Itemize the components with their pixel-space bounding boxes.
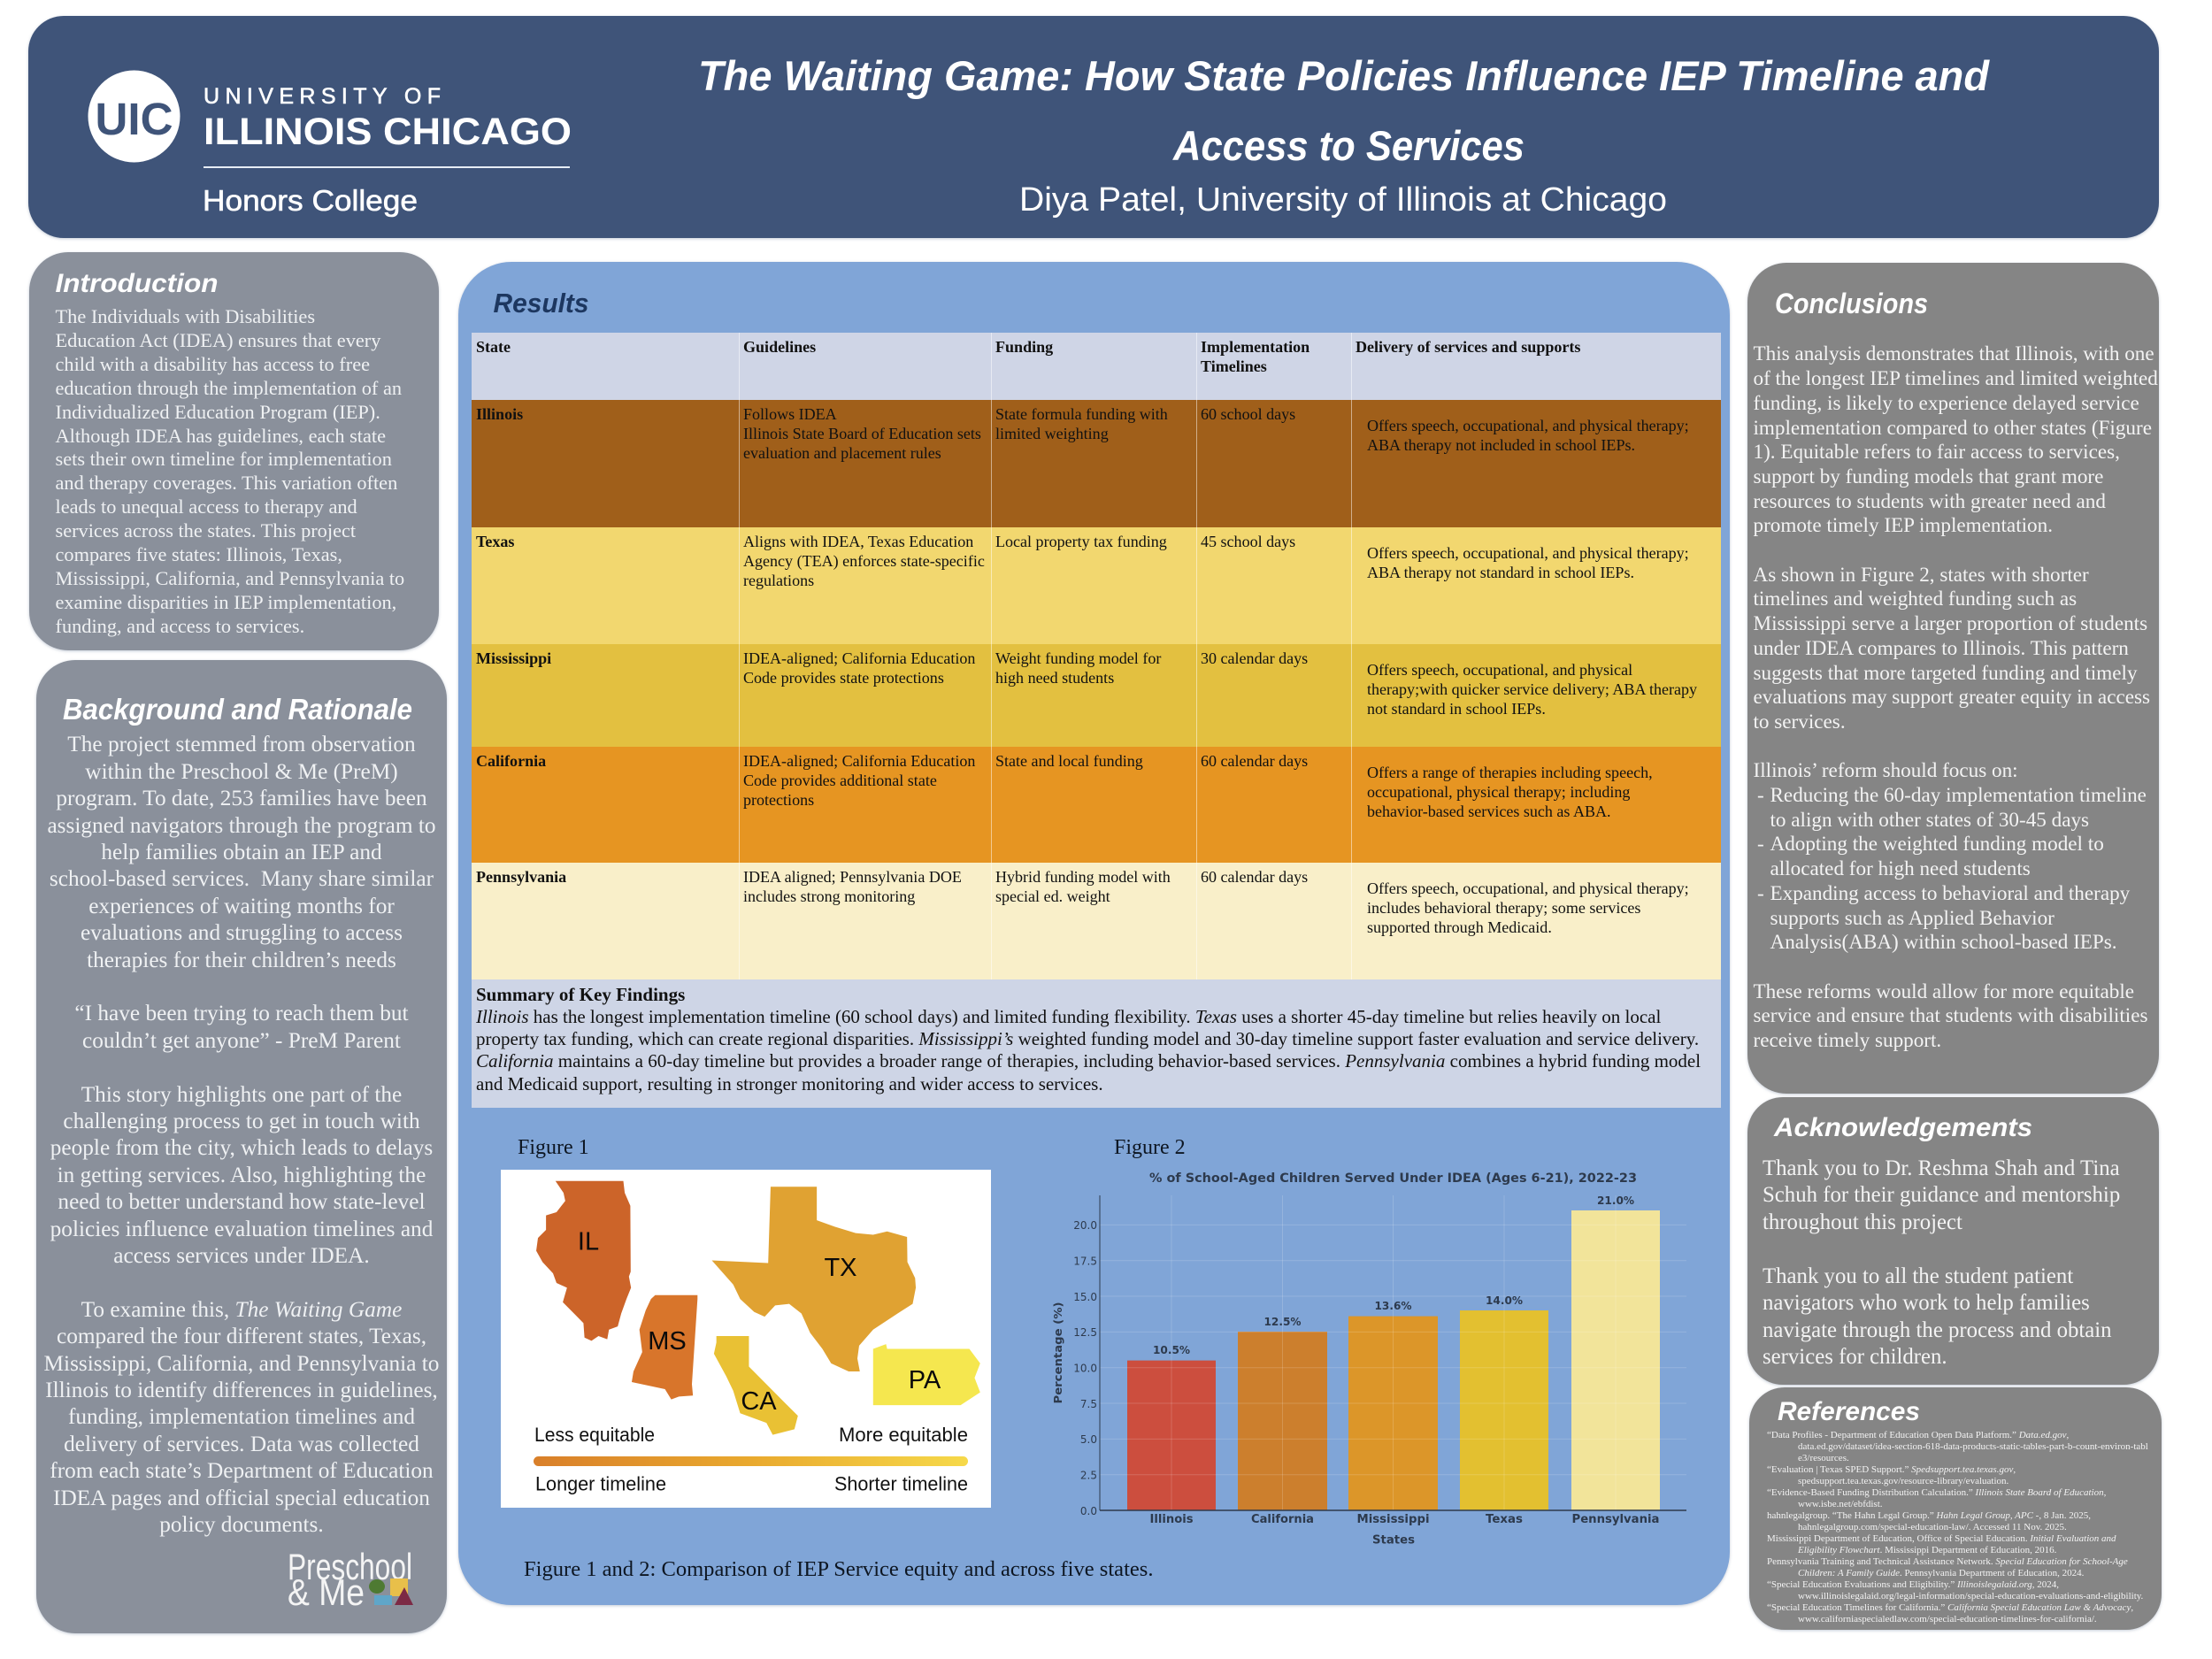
text: background body: access services under IDEA. — [113, 1243, 370, 1268]
row: Pennsylvania — [472, 863, 1721, 979]
logo: Preschool & Me — [288, 1548, 413, 1607]
y axis tick labels: 0.0 — [1080, 1505, 1097, 1517]
figure 1: state equity map — [501, 1170, 991, 1508]
value labels: 21.0% — [1597, 1194, 1634, 1207]
figure 1: state equity map: CA — [741, 1387, 777, 1416]
heading: Results: Results — [494, 288, 589, 319]
figure 1: state equity map: IL — [578, 1228, 599, 1256]
text: background body: compared the four different states, Texas, — [57, 1324, 426, 1348]
row: Texas: Agency (TEA) enforces state-specific — [743, 552, 985, 570]
text: acknowledgements body: throughout this project — [1763, 1210, 1962, 1233]
text: conclusions body: These reforms would allow for more equitable — [1754, 980, 2134, 1003]
text: background body — [44, 732, 439, 1537]
row: Illinois: evaluation and placement rules — [743, 444, 941, 462]
text: background body: help families obtain an IEP and — [101, 840, 382, 864]
panel: background and rationale — [36, 660, 447, 1633]
text: introduction body: Mississippi, California, and Pennsylvania to — [55, 567, 404, 589]
row: Mississippi: Mississippi — [476, 649, 551, 667]
text: acknowledgements body: Schuh for their guidance and mentorship — [1763, 1183, 2120, 1207]
value labels — [1153, 1194, 1634, 1356]
y axis tick labels: 7.5 — [1080, 1398, 1097, 1410]
text: introduction body: child with a disability has access to free — [55, 353, 370, 375]
text: conclusions body: timelines and weighted funding such as — [1754, 588, 2077, 611]
row: California: 60 calendar days — [1201, 752, 1308, 770]
text: conclusions body: of the longest IEP timelines and limited weighted — [1754, 367, 2158, 390]
figure 1: state equity map: MS — [648, 1327, 687, 1356]
value labels: 14.0% — [1486, 1294, 1523, 1307]
text: reference list: spedsupport.tea.texas.gov/resource-library/evaluation. — [1798, 1476, 2008, 1486]
row: California: Code provides additional state — [743, 772, 937, 789]
title: The Waiting Game: How State Policies Influence IEP Timeline and — [698, 52, 1990, 99]
row: Illinois: Follows IDEA — [743, 405, 837, 423]
title: Access to Services — [1172, 122, 1525, 169]
table header row: Timelines — [1201, 357, 1267, 375]
text: introduction body: education through the implementation of an — [55, 377, 402, 399]
text: background body: This story highlights one part of the — [81, 1082, 402, 1107]
text: reference list: “Data Profiles - Department of Education Open Data Platform.” Data.ed.gov, “Evaluation | Texas SPED Support.” Spedsupport.tea.texas.gov, “Evidence-Based Funding Distribution Calculation.” Illinois State Board of Education, hahnlegalgroup. “The Hahn Legal Group.” Hahn Legal Group, APC -, 8 Jan. 2025, Mississippi Department of Education, Office of Special Education. Initial Evaluation and Pennsylvania Training and Technical Assistance Network. Special Education for School-Age “Special Education Evaluations and Eligibility.” Illinoislegalaid.org, 2024, “Special Education Timelines for California.” California Special Education Law & Advocacy, — [1767, 1430, 2133, 1612]
text: background body: in getting services. Also, highlighting the — [58, 1163, 426, 1187]
figure 1: state equity map: TX — [824, 1254, 857, 1282]
state shape: Pennsylvania — [873, 1344, 980, 1405]
text: background body: therapies for their children’s needs — [87, 948, 396, 972]
logo: UIC Honors College: Honors College — [203, 184, 418, 217]
summary of key findings: property tax funding, which can create regional disparities. Mississippi’s weighted funding model and 30-day timeline support faster evaluation and service delivery. — [476, 1028, 1699, 1049]
row: Mississippi: IDEA-aligned; California Education — [743, 649, 975, 667]
row: Pennsylvania: Pennsylvania — [476, 868, 566, 886]
x axis labels: Pennsylvania — [1571, 1513, 1660, 1526]
text: conclusions body: suggests that more targeted funding and timely — [1754, 662, 2138, 685]
text: introduction body: services across the states. This project — [55, 519, 356, 541]
text: reference list: data.ed.gov/dataset/idea-section-618-data-products-static-tables-part-b-count-environ-tabl — [1798, 1440, 2148, 1451]
y axis tick labels: 20.0 — [1073, 1219, 1097, 1232]
legend: equity and timeline scale: More equitable — [839, 1424, 968, 1446]
table header row: State — [476, 338, 511, 356]
heading: Background and Rationale: Background and Rationale — [63, 693, 412, 726]
text: introduction body: sets their own timeline for implementation — [55, 448, 392, 470]
header banner — [28, 16, 2159, 238]
text: background body: challenging process to get in touch with — [63, 1109, 420, 1133]
text: reference list: e3/resources. — [1798, 1453, 1849, 1463]
text: conclusions body: supports such as Applied Behavior — [1770, 907, 2055, 930]
row: Illinois — [472, 400, 1721, 527]
text: conclusions body: - — [1757, 882, 1764, 905]
row: Texas: Aligns with IDEA, Texas Education — [743, 533, 973, 550]
text: reference list: Eligibility Flowchart. Mississippi Department of Education, 2016. — [1798, 1545, 2056, 1555]
row: Mississippi: Offers speech, occupational, and physical — [1367, 661, 1632, 679]
heading: Introduction: Introduction — [55, 269, 218, 298]
logo: UIC Honors College: UIC — [96, 94, 173, 144]
text: background body: within the Preschool & Me (PreM) — [85, 759, 398, 784]
text: introduction body: Individualized Education Program (IEP). — [55, 401, 380, 423]
x axis labels: Texas — [1486, 1513, 1523, 1526]
text: acknowledgements body — [1763, 1156, 2120, 1369]
legend: equity and timeline scale: Shorter timeline — [834, 1472, 968, 1495]
text: background body: people from the city, which leads to delays — [50, 1135, 433, 1160]
row: Illinois: limited weighting — [995, 425, 1109, 442]
row: California: State and local funding — [995, 752, 1143, 770]
text: background body: policies influence evaluation timelines and — [50, 1217, 433, 1241]
text: conclusions body: As shown in Figure 2, states with shorter — [1754, 564, 2089, 587]
table header row: Funding — [995, 338, 1053, 356]
heading: Conclusions: Conclusions — [1775, 288, 1928, 319]
figure 2: bar chart: % of School-Aged Children Served Under IDEA (Ages 6-21), 2022-23 — [1149, 1171, 1637, 1186]
heading: Acknowledgements: Acknowledgements — [1773, 1113, 2032, 1142]
row: Pennsylvania: 60 calendar days — [1201, 868, 1308, 886]
y axis tick labels: 15.0 — [1073, 1291, 1097, 1303]
x axis labels: States — [1372, 1534, 1415, 1547]
text: conclusions body: under IDEA compares to Illinois. This pattern — [1754, 637, 2129, 660]
row: Illinois: Illinois State Board of Education sets — [743, 425, 981, 442]
legend: equity and timeline scale — [534, 1424, 968, 1495]
row: Pennsylvania: includes strong monitoring — [743, 887, 915, 905]
y axis tick labels: 12.5 — [1073, 1326, 1097, 1339]
text: background body: policy documents. — [159, 1512, 324, 1537]
text: reference list: www.californiaspecialedlaw.com/special-education-timelines-for-california/. — [1798, 1614, 2097, 1624]
text: conclusions body: to align with other states of 30-45 days — [1770, 809, 2089, 832]
summary of key findings — [472, 979, 1721, 1108]
summary of key findings: Summary of Key Findings — [476, 984, 685, 1005]
text: conclusions body: receive timely support. — [1754, 1029, 1941, 1052]
row: Texas: Local property tax funding — [995, 533, 1167, 550]
table header row — [472, 333, 1721, 400]
text: conclusions body: allocated for high need students — [1770, 857, 2031, 880]
row: Pennsylvania: supported through Medicaid. — [1367, 918, 1552, 936]
x axis labels — [1051, 1302, 1660, 1547]
text: background body: Illinois to identify differences in guidelines, — [45, 1378, 438, 1402]
row: Texas — [472, 527, 1721, 644]
text: conclusions body: Mississippi serve a larger proportion of students — [1754, 612, 2147, 635]
label: Figure 2: Figure 2 — [1114, 1136, 1186, 1159]
text: acknowledgements body: services for children. — [1763, 1345, 1947, 1369]
row: Illinois: Offers speech, occupational, and physical therapy; — [1367, 417, 1689, 434]
text: background body: evaluations and struggling to access — [81, 920, 403, 945]
row: Illinois: ABA therapy not included in school IEPs. — [1367, 436, 1635, 454]
logo: UIC Honors College: ILLINOIS CHICAGO — [204, 111, 572, 153]
row: California: California — [476, 752, 546, 770]
x axis labels: Illinois — [1150, 1513, 1194, 1526]
row: Pennsylvania: includes behavioral therapy; some services — [1367, 899, 1640, 917]
text: conclusions body: Adopting the weighted funding model to — [1770, 833, 2104, 856]
table header row: Guidelines — [743, 338, 816, 356]
text: background body: funding, implementation timelines and — [68, 1404, 415, 1429]
text: background body: school-based services. Many share similar — [50, 866, 434, 891]
table: state comparison — [472, 333, 1721, 1108]
legend: equity and timeline scale: Less equitable — [534, 1424, 655, 1446]
text: introduction body: leads to unequal access to therapy and — [55, 495, 357, 518]
text: background body: program. To date, 253 families have been — [56, 786, 427, 810]
text: conclusions body — [1754, 342, 2158, 1052]
text: introduction body: The Individuals with Disabilities — [55, 305, 315, 327]
summary of key findings: and Medicaid support, resulting in stronger monitoring and wider access to services. — [476, 1073, 1103, 1094]
text: background body: from each state’s Department of Education — [50, 1458, 434, 1483]
row: California: protections — [743, 791, 814, 809]
text: reference list: Children: A Family Guide. Pennsylvania Department of Education, 2024. — [1798, 1568, 2084, 1578]
row: Texas: regulations — [743, 572, 814, 589]
state shape: California — [714, 1336, 798, 1435]
text: introduction body: and therapy coverages. This variation often — [55, 472, 397, 494]
panel: acknowledgements — [1747, 1097, 2159, 1385]
value labels: 10.5% — [1153, 1343, 1190, 1356]
text: conclusions body: implementation compared to other states (Figure — [1754, 416, 2152, 439]
text: acknowledgements body: navigators who work to help families — [1763, 1291, 2090, 1315]
panel: introduction — [29, 252, 439, 650]
panel: results — [458, 262, 1730, 1605]
value labels: 13.6% — [1375, 1299, 1412, 1312]
text: conclusions body: funding, is likely to experience delayed service — [1754, 392, 2139, 415]
logo: UIC Honors College: UNIVERSITY OF — [204, 84, 441, 109]
y axis tick labels: 5.0 — [1080, 1433, 1097, 1446]
state shape: Mississippi — [632, 1295, 697, 1400]
row: Mississippi: therapy;with quicker service delivery; ABA therapy — [1367, 680, 1697, 698]
row: Pennsylvania: special ed. weight — [995, 887, 1110, 905]
y axis tick labels: 2.5 — [1080, 1469, 1097, 1481]
text: background body: The project stemmed from observation — [67, 732, 416, 757]
text: conclusions body: promote timely IEP implementation. — [1754, 514, 2053, 537]
text: background body: experiences of waiting months for — [88, 894, 395, 918]
row: Mississippi: Code provides state protections — [743, 669, 944, 687]
text: conclusions body: service and ensure that students with disabilities — [1754, 1004, 2148, 1027]
text: introduction body — [55, 305, 404, 637]
row: Mississippi: 30 calendar days — [1201, 649, 1308, 667]
text: introduction body: funding, and access to services. — [55, 615, 304, 637]
row: California: behavior-based services such as ABA. — [1367, 803, 1611, 820]
row: Pennsylvania: IDEA aligned; Pennsylvania DOE — [743, 868, 962, 886]
text: conclusions body: - — [1757, 784, 1764, 807]
text: conclusions body: Illinois’ reform should focus on: — [1754, 759, 2018, 782]
table header row: Delivery of services and supports — [1356, 338, 1580, 356]
text: background body: Mississippi, California, and Pennsylvania to — [44, 1351, 439, 1376]
text: introduction body: Education Act (IDEA) ensures that every — [55, 329, 380, 351]
legend: equity and timeline scale: Longer timeline — [535, 1472, 666, 1495]
row: California — [472, 747, 1721, 863]
figure 2: bar chart — [1053, 1171, 1686, 1547]
text: conclusions body: resources to students with greater need and — [1754, 490, 2106, 513]
text: background body: To examine this, The Waiting Game — [81, 1297, 402, 1322]
x axis labels: California — [1251, 1513, 1314, 1526]
text: background body: assigned navigators through the program to — [47, 813, 436, 838]
panel: references — [1749, 1387, 2162, 1630]
row: Texas: Texas — [476, 533, 514, 550]
y axis tick labels: 10.0 — [1073, 1363, 1097, 1375]
text: background body: delivery of services. Data was collected — [64, 1432, 419, 1456]
figure 1: state equity map: PA — [909, 1366, 941, 1394]
row: Pennsylvania: Hybrid funding model with — [995, 868, 1171, 886]
text: introduction body: examine disparities in IEP implementation, — [55, 591, 396, 613]
text: background body: IDEA pages and official special education — [53, 1486, 430, 1510]
row: Illinois: 60 school days — [1201, 405, 1295, 423]
row: Illinois: Illinois — [476, 405, 523, 423]
text: introduction body: Although IDEA has guidelines, each state — [55, 425, 386, 447]
text: conclusions body: support by funding models that grant more — [1754, 465, 2103, 488]
panel: conclusions — [1747, 263, 2159, 1094]
text: reference list: www.illinoislegalaid.org/legal-information/special-education-evaluations-and-eligibility. — [1798, 1591, 2143, 1601]
row: Texas: 45 school days — [1201, 533, 1295, 550]
text: conclusions body: - — [1757, 833, 1764, 856]
row: Texas: Offers speech, occupational, and physical therapy; — [1367, 544, 1689, 562]
text: acknowledgements body: navigate through the process and obtain — [1763, 1318, 2112, 1341]
logo: UIC Honors College — [88, 71, 572, 218]
text: acknowledgements body: Thank you to Dr. Reshma Shah and Tina — [1763, 1156, 2120, 1180]
figure caption: Figure 1 and 2: Comparison of IEP Service equity and across five states. — [524, 1557, 1153, 1581]
state shape: Illinois — [536, 1181, 631, 1340]
row: California: IDEA-aligned; California Education — [743, 752, 975, 770]
row: Texas: ABA therapy not standard in school IEPs. — [1367, 564, 1634, 581]
label: Figure 1: Figure 1 — [518, 1136, 589, 1159]
title — [698, 52, 1990, 169]
row: Mississippi: not standard in school IEPs. — [1367, 700, 1546, 718]
table header row: Implementation — [1201, 338, 1310, 356]
heading: References: References — [1778, 1397, 1920, 1426]
bars — [1127, 1210, 1660, 1510]
summary of key findings: California maintains a 60-day timeline but provides a broader range of therapies, including behavior-based services. Pennsylvania combines a hybrid funding model — [476, 1050, 1701, 1071]
text: conclusions body: to services. — [1754, 710, 1846, 733]
summary of key findings: Illinois has the longest implementation timeline (60 school days) and limited funding flexibility. Texas uses a shorter 45-day timeline but relies heavily on local — [476, 1006, 1661, 1027]
value labels: 12.5% — [1263, 1315, 1302, 1328]
text: conclusions body: Analysis(ABA) within school-based IEPs. — [1770, 931, 2117, 954]
text: conclusions body: evaluations may support greater equity in access — [1754, 686, 2150, 709]
row: Mississippi: Weight funding model for — [995, 649, 1161, 667]
row: Mississippi: high need students — [995, 669, 1114, 687]
text: conclusions body: 1). Equitable refers to fair access to services, — [1754, 441, 2120, 464]
text: introduction body: compares five states: Illinois, Texas, — [55, 543, 342, 565]
text: conclusions body: Expanding access to behavioral and therapy — [1770, 882, 2130, 905]
text: background body: couldn’t get anyone” - PreM Parent — [82, 1028, 401, 1053]
y axis tick labels: 17.5 — [1073, 1255, 1097, 1267]
axes — [1100, 1195, 1686, 1510]
text: conclusions body: This analysis demonstrates that Illinois, with one — [1754, 342, 2154, 365]
text: background body: “I have been trying to reach them but — [74, 1001, 409, 1025]
row: Illinois: State formula funding with — [995, 405, 1168, 423]
text: reference list: hahnlegalgroup.com/special-education-law/. Accessed 11 Nov. 2025. — [1798, 1522, 2067, 1532]
row: Mississippi — [472, 644, 1721, 747]
row: California: occupational, physical therapy; including — [1367, 783, 1630, 801]
state shape: Texas — [712, 1187, 916, 1371]
y axis tick labels — [1073, 1219, 1097, 1517]
text: acknowledgements body: Thank you to all the student patient — [1763, 1263, 2073, 1288]
row: California: Offers a range of therapies including speech, — [1367, 764, 1653, 781]
x axis labels: Mississippi — [1357, 1513, 1430, 1526]
text: conclusions body: Reducing the 60-day implementation timeline — [1770, 784, 2147, 807]
row: Pennsylvania: Offers speech, occupational, and physical therapy; — [1367, 879, 1689, 897]
text: background body: need to better understand how state-level — [58, 1189, 426, 1214]
text: reference list: www.isbe.net/ebfdist. — [1798, 1499, 1883, 1509]
